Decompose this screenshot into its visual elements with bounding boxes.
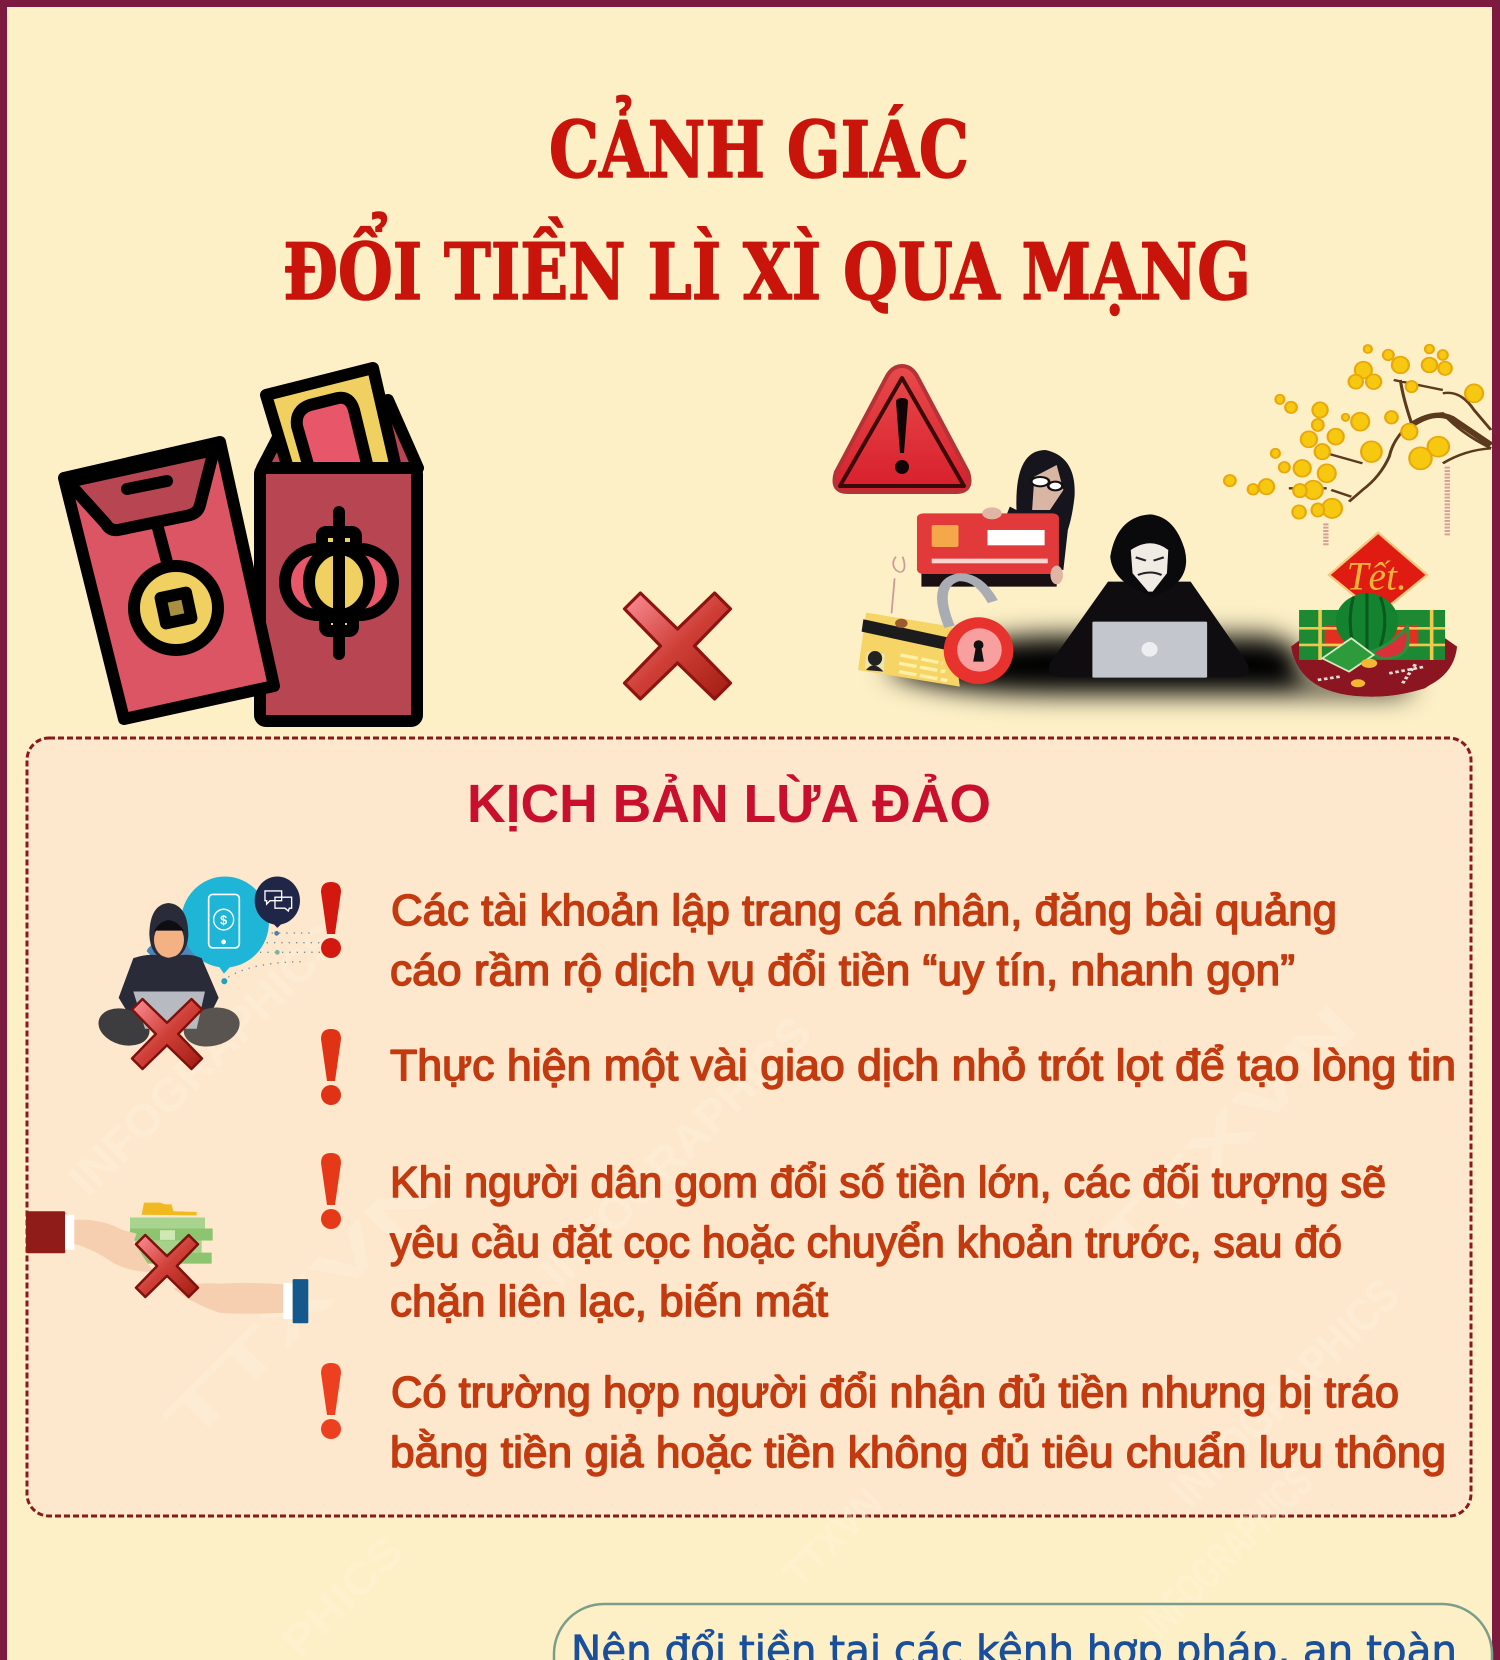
- left envelope: [64, 442, 274, 719]
- text: scenario 3: [390, 1158, 1386, 1326]
- watermark: INFOGRAPHICS: [530, 1006, 822, 1297]
- icon: exclamation mark 4: [321, 1363, 341, 1439]
- icon: exclamation mark 2: [321, 1029, 341, 1105]
- icon: X over hacker: [132, 999, 202, 1069]
- text: scenario 3: Khi người dân gom đổi số tiền lớn, các đối tượng sẽ: [390, 1158, 1386, 1207]
- watermark below panel: TTXVN: [775, 1480, 891, 1596]
- text: scenario 1: cáo rầm rộ dịch vụ đổi tiền “uy tín, nhanh gọn”: [390, 946, 1295, 995]
- title: CẢNH GIÁC: [549, 94, 969, 196]
- watermark: TTXVN: [152, 1152, 454, 1454]
- icon: large red X: [624, 593, 730, 699]
- callout: advice box: [554, 1604, 1492, 1660]
- icon: exclamation mark 3: [321, 1153, 341, 1229]
- icon: exclamation mark 1: [321, 882, 341, 958]
- watermark below panel: [272, 1457, 1323, 1660]
- illustration: apricot blossom branch: [1224, 345, 1491, 547]
- illustration: Tet tray: [1291, 533, 1457, 697]
- watermark: INFOGRAPHICS: [1160, 1268, 1409, 1517]
- icon: hacker with phone bubbles: $: [220, 912, 227, 927]
- right envelope: [260, 468, 417, 721]
- title: [283, 94, 1251, 318]
- illustration: hooked ID card: [858, 557, 960, 687]
- icon: hands exchanging money: [26, 1203, 308, 1323]
- icon: hacker with phone bubbles: [94, 877, 322, 1052]
- watermark: TTXVN: [1082, 991, 1370, 1279]
- text: scenario 1: [390, 886, 1337, 995]
- text: scenario 3: chặn liên lạc, biến mất: [390, 1277, 828, 1326]
- text: scenario 4: bằng tiền giả hoặc tiền không đủ tiêu chuẩn lưu thông: [390, 1428, 1446, 1477]
- watermark: [58, 914, 1409, 1517]
- icon: red envelopes: [64, 368, 418, 721]
- text: scenario 4: Có trường hợp người đổi nhận đủ tiền nhưng bị tráo: [391, 1368, 1399, 1417]
- bill in right envelope: [262, 368, 418, 468]
- icon: warning triangle: [834, 366, 970, 492]
- illustration: Tet tray: Tết.: [1347, 555, 1407, 599]
- illustration: open padlock: [942, 577, 1013, 684]
- text: scenario 1: Các tài khoản lập trang cá nhân, đăng bài quảng: [391, 886, 1337, 935]
- text: scenario 2: Thực hiện một vài giao dịch nhỏ trót lọt để tạo lòng tin: [390, 1041, 1456, 1090]
- panel: scam scenarios: [26, 738, 1471, 1517]
- title: ĐỔI TIỀN LÌ XÌ QUA MẠNG: [283, 211, 1251, 318]
- text: scenario 4: [390, 1368, 1446, 1477]
- illustration: woman hacker with credit card: [917, 450, 1075, 587]
- watermark: INFOGRAPHICS: [58, 914, 350, 1205]
- icon: X over money: [136, 1235, 198, 1297]
- panel heading: KỊCH BẢN LỪA ĐẢO: [467, 774, 991, 834]
- watermark below panel: INFOGRAPHICS: [1132, 1457, 1323, 1647]
- text: scenario 3: yêu cầu đặt cọc hoặc chuyển khoản trước, sau đó: [390, 1218, 1342, 1267]
- illustration: masked hacker with laptop: [1049, 514, 1249, 678]
- illustration: soft shadow: [884, 636, 1412, 694]
